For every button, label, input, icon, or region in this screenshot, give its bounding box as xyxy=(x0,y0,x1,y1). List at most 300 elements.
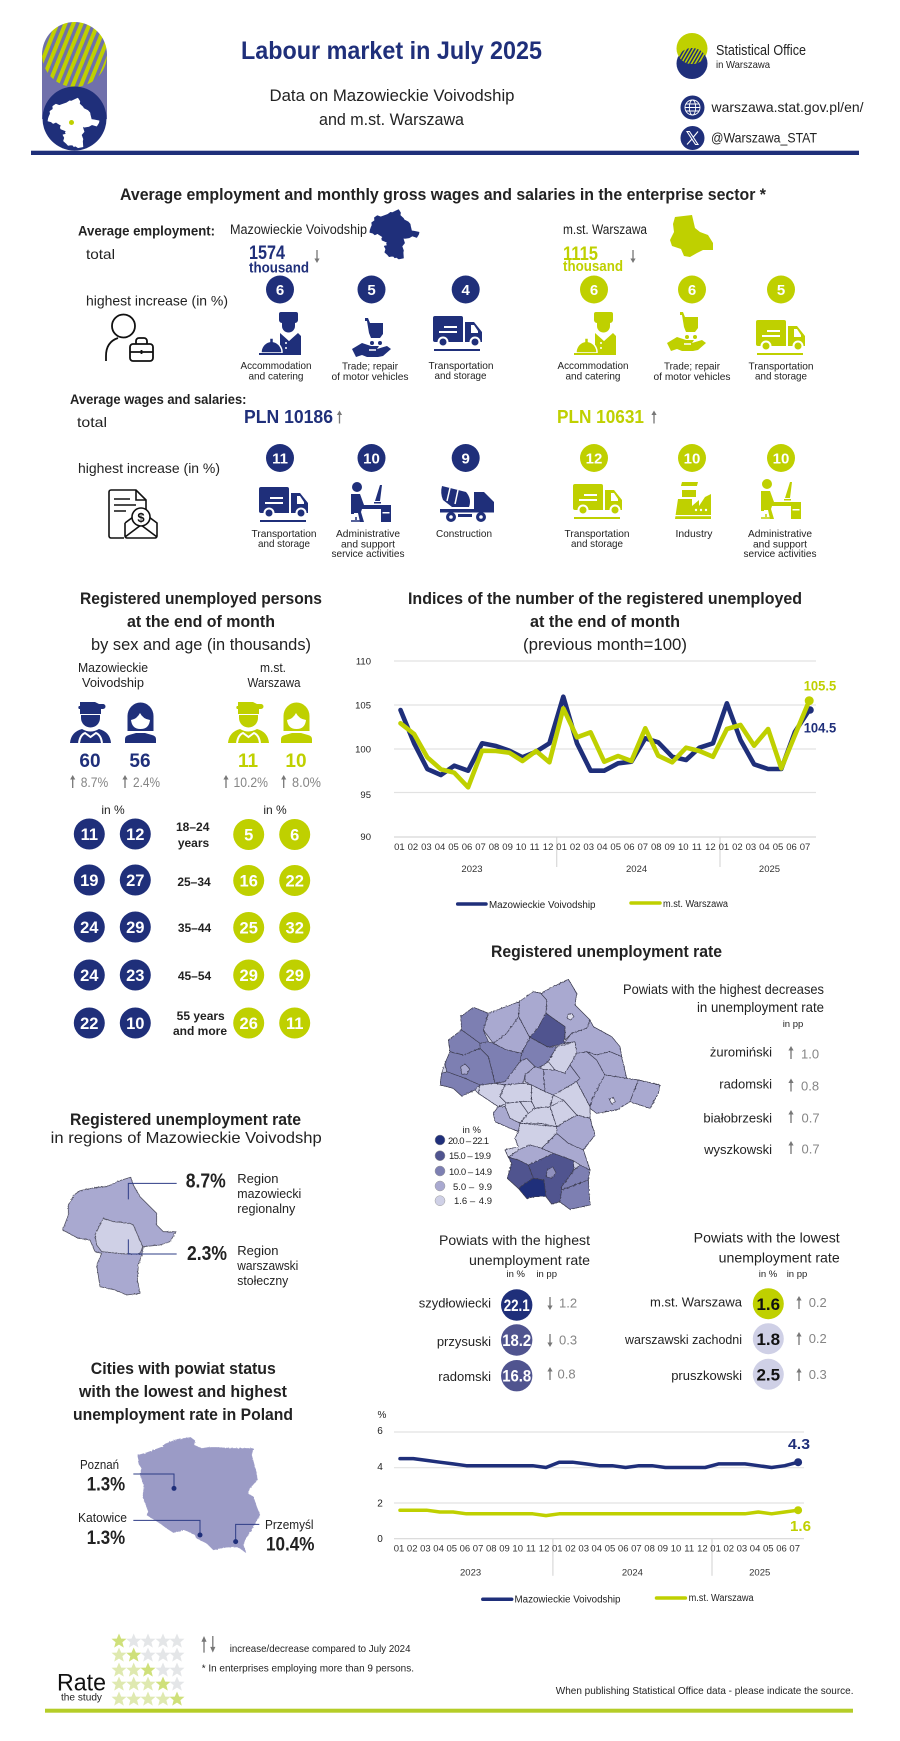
panel: highest unemployment rate: radomski xyxy=(438,1369,491,1384)
line chart: indices: 07 xyxy=(475,842,486,853)
year-on-year changes: 8.0% xyxy=(292,775,321,790)
employment sector labels: Transportation xyxy=(748,360,814,372)
panel: highest decreases: 0.7 xyxy=(802,1111,820,1126)
panel: highest unemployment rate: 22.1 xyxy=(504,1296,530,1315)
Mazowieckie wages: PLN 10186 xyxy=(244,407,333,427)
callouts: regional rates xyxy=(186,1171,301,1288)
employment increase badges: 6 xyxy=(590,282,598,299)
legend: m.st. Warszawa xyxy=(689,1593,754,1604)
logo: Statistical Office in Warszawa: Statistical Office xyxy=(716,43,806,59)
line chart: unemployment rate: 02 xyxy=(565,1544,576,1555)
wages increase badges: 12 xyxy=(586,450,602,468)
line chart: indices: 11 xyxy=(692,842,702,853)
age group badges: Warszawa xyxy=(233,819,310,1038)
map legend: 1.6 – xyxy=(454,1196,476,1207)
legend: m.st. Warszawa xyxy=(663,899,728,910)
line chart: indices: 95 xyxy=(360,790,371,801)
wage sector labels: and storage xyxy=(571,538,623,550)
age group badges: Warszawa: 16 xyxy=(240,872,258,890)
icon: payslip document and envelope xyxy=(109,490,157,538)
callouts: regional rates: 2.3% xyxy=(187,1243,227,1265)
heading: cities with powiat status xyxy=(73,1359,293,1424)
callouts: regional rates: stołeczny xyxy=(237,1273,289,1288)
age group badges: Mazowieckie: 27 xyxy=(126,872,144,890)
map legend: 9.9 xyxy=(479,1182,492,1193)
line chart: indices: 03 xyxy=(583,842,594,853)
arrows key xyxy=(201,1636,411,1655)
panel: unemployed by sex xyxy=(70,661,321,1038)
employment increase badges: 6 xyxy=(688,282,696,299)
year-on-year changes xyxy=(70,775,321,790)
age group badges: Warszawa: 32 xyxy=(286,920,304,938)
line chart: indices: 06 xyxy=(786,842,797,853)
arrows key: increase/decrease compared to July 2024 xyxy=(230,1643,411,1655)
series: Mazowieckie rate xyxy=(400,1458,802,1468)
map legend: 10.0 – 14.9 xyxy=(449,1167,492,1178)
line chart: indices: 2023 xyxy=(461,864,483,875)
panel: highest unemployment rate: in % xyxy=(506,1269,525,1280)
employment sector labels: and catering xyxy=(248,370,304,382)
line chart: unemployment rate: 08 xyxy=(486,1544,497,1555)
line chart: unemployment rate: 12 xyxy=(697,1544,708,1555)
line chart: indices: 07 xyxy=(638,842,648,853)
series: Warszawa rate xyxy=(400,1506,802,1516)
panel: highest decreases: 0.8 xyxy=(801,1079,819,1094)
panel: highest unemployment rate: 0.3 xyxy=(559,1333,577,1348)
line chart: unemployment rate: 03 xyxy=(737,1544,747,1555)
age group labels: 55 years xyxy=(177,1009,225,1023)
wage sector labels: and support xyxy=(753,538,807,550)
age group badges: Mazowieckie: 29 xyxy=(126,919,144,937)
line chart: indices: 04 xyxy=(597,842,607,853)
age group badges: Mazowieckie: 11 xyxy=(81,826,98,844)
line chart: unemployment rate: 10 xyxy=(671,1544,681,1555)
subtitle xyxy=(270,86,514,129)
line chart: unemployment rate: 4 xyxy=(377,1462,383,1473)
heading: registered unemployed persons: Registered unemployed persons xyxy=(80,589,322,608)
line chart: unemployment rate: 01 xyxy=(552,1544,563,1555)
wage sector labels: Administrative xyxy=(748,528,812,540)
wage sector labels: service activities xyxy=(744,548,816,560)
map legend xyxy=(435,1125,492,1207)
line chart: unemployment rate: 09 xyxy=(499,1544,510,1555)
callouts: regional rates: warszawski xyxy=(236,1258,298,1273)
line chart: indices: 05 xyxy=(448,842,459,853)
panel: lowest unemployment rate: 0.2 xyxy=(809,1331,827,1346)
line chart: unemployment rate: 11 xyxy=(526,1544,536,1555)
panel: unemployed by sex: Mazowieckie xyxy=(78,661,148,675)
panel: highest decreases xyxy=(623,981,824,1157)
heading: registered unemployed persons: by sex and age (in thousands) xyxy=(91,635,311,654)
line chart: indices: 05 xyxy=(773,842,783,853)
line chart: unemployment rate: 1.6 xyxy=(790,1518,811,1535)
line chart: indices: 100 xyxy=(355,744,371,756)
header graphic: capsule with map xyxy=(42,22,107,150)
line chart: indices: 03 xyxy=(421,842,432,853)
Warszawa total xyxy=(563,215,713,275)
wage sector labels: and storage xyxy=(258,538,310,550)
panel: highest unemployment rate: 1.2 xyxy=(559,1296,577,1311)
icons: employment sectors xyxy=(259,312,805,357)
panel: unemployed by sex: in % xyxy=(263,803,287,817)
line chart: indices: 12 xyxy=(543,842,553,853)
line chart: indices: 10 xyxy=(516,842,526,853)
line chart: indices: 06 xyxy=(462,842,472,853)
panel: highest unemployment rate: przysuski xyxy=(437,1334,491,1349)
line chart: unemployment rate: 07 xyxy=(473,1544,483,1555)
panel: lowest unemployment rate: 2.5 xyxy=(756,1366,780,1384)
line chart: unemployment rate: 11 xyxy=(684,1544,694,1555)
employment sector labels: and storage xyxy=(755,370,807,382)
callouts: regional rates: mazowiecki xyxy=(237,1186,301,1201)
line chart: indices: 105 xyxy=(355,700,371,712)
wage sector labels: Transportation xyxy=(252,528,317,540)
legend xyxy=(458,899,728,911)
legend: Mazowieckie Voivodship xyxy=(514,1595,621,1606)
employment increase badges: 5 xyxy=(367,282,376,299)
line chart: indices: 09 xyxy=(502,842,513,853)
employment increase badges xyxy=(266,276,795,304)
panel: lowest unemployment rate: Powiats with the lowest xyxy=(694,1230,840,1246)
line chart: unemployment rate: 0 xyxy=(377,1534,383,1545)
wages increase badges: 10 xyxy=(684,450,700,468)
line chart: unemployment rate: 02 xyxy=(724,1544,734,1555)
age group badges: Warszawa: 22 xyxy=(286,872,304,890)
employment sector labels: Transportation xyxy=(428,360,494,372)
age group badges: Warszawa: 6 xyxy=(290,826,299,844)
line chart: indices: 01 xyxy=(394,842,405,853)
logo: Statistical Office in Warszawa xyxy=(676,33,806,79)
line chart: unemployment rate: 04 xyxy=(433,1544,444,1555)
map legend: in % xyxy=(462,1125,481,1136)
wage sector labels: Administrative xyxy=(336,528,400,540)
callouts: regional rates: regionalny xyxy=(237,1201,296,1216)
panel: lowest unemployment rate: 0.2 xyxy=(809,1295,827,1310)
line chart: unemployment rate: 6 xyxy=(377,1426,383,1437)
heading: indices xyxy=(408,589,802,654)
wages increase badges: 10 xyxy=(773,450,789,468)
age group labels: years xyxy=(178,836,210,850)
line chart: indices: 90 xyxy=(360,832,371,843)
Warszawa total: m.st. Warszawa xyxy=(563,222,647,237)
employment sector labels: Accommodation xyxy=(558,360,629,372)
heading: rate in regions: in regions of Mazowieckie Voivodshp xyxy=(51,1130,322,1147)
panel: average employment: total xyxy=(86,246,115,262)
year-on-year changes: 2.4% xyxy=(133,775,160,790)
totals by sex: 10 xyxy=(285,751,307,772)
panel: highest decreases: 0.7 xyxy=(802,1142,820,1157)
wage sector labels: Construction xyxy=(436,528,492,540)
line chart: unemployment rate: 06 xyxy=(460,1544,470,1555)
rate the study: star ratings: Rate xyxy=(57,1670,106,1697)
website link: warszawa.stat.gov.pl/en/ xyxy=(711,99,864,115)
city labels: Poznań xyxy=(80,1457,119,1472)
panel: highest decreases: radomski xyxy=(719,1077,772,1092)
line chart: indices: 06 xyxy=(624,842,634,853)
line chart: unemployment rate: 06 xyxy=(776,1544,787,1555)
line chart: indices: 03 xyxy=(746,842,756,853)
age group badges: Warszawa: 29 xyxy=(286,967,304,985)
X account xyxy=(680,126,817,150)
totals by sex xyxy=(79,751,307,772)
totals by sex: 60 xyxy=(79,751,101,772)
line chart: indices: 04 xyxy=(759,842,770,853)
map: powiats of Mazowieckie xyxy=(440,979,660,1209)
Warszawa wages: PLN 10631 xyxy=(557,407,644,427)
employment sector labels: Trade; repair xyxy=(342,360,398,372)
age group labels: and more xyxy=(173,1024,227,1038)
line chart: unemployment rate: 10 xyxy=(512,1544,523,1555)
panel: lowest unemployment rate: 0.3 xyxy=(809,1367,827,1382)
totals by sex: 56 xyxy=(129,751,151,772)
panel: highest decreases: wyszkowski xyxy=(703,1142,772,1157)
Mazowieckie total: thousand xyxy=(249,260,309,277)
panel: average employment: highest increase (in %) xyxy=(86,293,228,309)
map: regions of Mazowieckie xyxy=(63,1177,177,1295)
line chart: indices: 12 xyxy=(705,842,716,853)
panel: unemployed by sex: in % xyxy=(101,803,125,817)
panel: average wages xyxy=(70,391,816,560)
panel: highest decreases: żuromiński xyxy=(710,1045,772,1060)
panel: lowest unemployment rate: warszawski zachodni xyxy=(624,1332,742,1347)
line chart: unemployment rate: 2025 xyxy=(749,1568,770,1579)
website link xyxy=(680,96,864,120)
line chart: unemployment rate: 2024 xyxy=(622,1568,643,1579)
line chart: indices: 02 xyxy=(408,842,418,853)
age group badges: Warszawa: 25 xyxy=(240,920,258,938)
panel: highest unemployment rate: 16.8 xyxy=(502,1367,531,1386)
panel: highest unemployment rate: szydłowiecki xyxy=(419,1296,491,1311)
Mazowieckie total: 1574 xyxy=(249,243,285,264)
line chart: unemployment rate: 05 xyxy=(447,1544,457,1555)
panel: highest decreases: in pp xyxy=(783,1019,803,1030)
line chart: unemployment rate: 03 xyxy=(420,1544,431,1555)
panel: lowest unemployment rate xyxy=(624,1230,840,1390)
age group labels: 18–24 xyxy=(176,820,210,834)
employment sector labels: and storage xyxy=(434,370,487,382)
line chart: unemployment rate: 12 xyxy=(539,1544,549,1555)
Mazowieckie total: Mazowieckie Voivodship xyxy=(230,222,367,237)
map legend: 4.9 xyxy=(479,1196,492,1207)
city labels: 1.3% xyxy=(87,1528,125,1549)
panel: average employment: Average employment: xyxy=(78,222,215,238)
panel: highest unemployment rate: 18.2 xyxy=(502,1331,531,1350)
line chart: indices: 10 xyxy=(678,842,689,853)
city labels xyxy=(78,1457,315,1556)
panel: highest decreases: 1.0 xyxy=(801,1047,819,1062)
heading: indices: (previous month=100) xyxy=(523,635,687,654)
panel: average wages: Average wages and salaries: xyxy=(70,391,246,407)
age group labels: 45–54 xyxy=(178,969,212,983)
map legend: 20.0 – 22.1 xyxy=(448,1136,489,1147)
line chart: unemployment rate: 01 xyxy=(710,1544,721,1555)
wage sector labels: Transportation xyxy=(564,528,630,540)
panel: lowest unemployment rate: 1.6 xyxy=(756,1295,780,1314)
line chart: indices: 07 xyxy=(800,842,810,853)
line chart: unemployment rate: 04 xyxy=(750,1544,760,1555)
age group labels xyxy=(173,820,227,1038)
wages increase badges: 10 xyxy=(363,450,380,468)
wage sector labels: and support xyxy=(341,538,395,550)
line chart: indices: 105.5 xyxy=(804,678,836,694)
line chart: indices: 02 xyxy=(570,842,580,853)
line chart: indices: 05 xyxy=(610,842,621,853)
line chart: indices: 08 xyxy=(489,842,499,853)
age group badges: Warszawa: 5 xyxy=(244,826,253,844)
heading: cities with powiat status: with the lowest and highest xyxy=(78,1382,287,1401)
line chart: indices xyxy=(355,656,836,911)
heading: registered unemployed persons: at the end of month xyxy=(127,612,275,631)
panel: lowest unemployment rate: in % xyxy=(759,1269,778,1280)
line chart: indices: 01 xyxy=(556,842,567,853)
line chart: indices: 01 xyxy=(719,842,729,853)
age group badges: Mazowieckie: 10 xyxy=(126,1015,144,1033)
heading: enterprise sector: Average employment and monthly gross wages and salaries in the enterprise sector * xyxy=(120,185,766,204)
line chart: indices: 104.5 xyxy=(804,720,836,736)
line chart: unemployment rate xyxy=(377,1410,811,1606)
city labels: Katowice xyxy=(78,1510,127,1525)
heading: cities with powiat status: unemployment rate in Poland xyxy=(73,1405,293,1424)
panel: highest decreases: białobrzeski xyxy=(703,1111,772,1126)
age group badges: Mazowieckie: 19 xyxy=(80,872,98,890)
legend: Mazowieckie Voivodship xyxy=(489,900,596,911)
panel: highest unemployment rate: in pp xyxy=(536,1269,557,1280)
callouts: regional rates: Region xyxy=(237,1243,279,1258)
line chart: indices: 2025 xyxy=(759,864,780,875)
callouts: regional rates: 8.7% xyxy=(186,1171,226,1193)
line chart: unemployment rate: 05 xyxy=(605,1544,615,1555)
map legend: 15.0 – 19.9 xyxy=(449,1151,491,1162)
employment sector labels: and catering xyxy=(566,370,621,382)
rate the study: star ratings: the study xyxy=(61,1692,103,1704)
city labels: Przemyśl xyxy=(265,1517,314,1532)
panel: average employment xyxy=(78,210,814,383)
line chart: indices: 02 xyxy=(732,842,743,853)
map legend: 5.0 – xyxy=(453,1182,475,1193)
wage sector labels: service activities xyxy=(332,548,404,560)
age group badges: Warszawa: 11 xyxy=(286,1015,303,1033)
Warszawa total: 1115 xyxy=(563,244,598,265)
Warszawa total: thousand xyxy=(563,258,623,275)
year-on-year changes: 8.7% xyxy=(81,775,108,790)
heading: cities with powiat status: Cities with powiat status xyxy=(91,1359,276,1378)
panel: highest unemployment rate: unemployment rate xyxy=(469,1252,590,1268)
age group badges: Mazowieckie: 23 xyxy=(126,967,144,985)
X account: @Warszawa_STAT xyxy=(711,130,817,146)
icon: payslip document and envelope: $ xyxy=(137,510,145,525)
heading: indices: at the end of month xyxy=(530,612,680,631)
Mazowieckie total xyxy=(230,210,419,277)
age group badges: Warszawa: 26 xyxy=(240,1015,258,1033)
heading: registered unemployment rate: Registered unemployment rate xyxy=(491,942,722,961)
wages increase badges xyxy=(266,444,795,472)
panel: lowest unemployment rate: unemployment rate xyxy=(719,1250,840,1266)
employment increase badges: 5 xyxy=(777,282,785,299)
panel: unemployed by sex: Warszawa xyxy=(248,676,301,690)
panel: highest unemployment rate: Powiats with the highest xyxy=(439,1232,590,1248)
city labels: 1.3% xyxy=(87,1475,125,1496)
line chart: unemployment rate: % xyxy=(378,1410,387,1421)
heading: rate in regions xyxy=(51,1110,322,1147)
city labels: 10.4% xyxy=(266,1535,315,1556)
wages increase badges: 11 xyxy=(272,450,288,468)
employment sector labels: Accommodation xyxy=(240,360,312,372)
line chart: unemployment rate: 09 xyxy=(658,1544,668,1555)
line chart: unemployment rate: 07 xyxy=(789,1544,800,1555)
line chart: indices: 08 xyxy=(651,842,662,853)
line chart: unemployment rate: 03 xyxy=(578,1544,589,1555)
panel: highest decreases: Powiats with the highest decreases xyxy=(623,981,824,997)
line chart: unemployment rate: 2023 xyxy=(460,1568,481,1579)
subtitle: Data on Mazowieckie Voivodship xyxy=(270,86,514,105)
age group badges: Mazowieckie: 24 xyxy=(80,967,99,985)
heading: rate in regions: Registered unemployment rate xyxy=(70,1110,301,1129)
age group badges: Mazowieckie: 12 xyxy=(126,826,144,844)
icons: man and woman xyxy=(70,702,312,743)
employment sector labels: Trade; repair xyxy=(664,360,720,372)
wage sector labels: Industry xyxy=(676,528,713,540)
age group labels: 35–44 xyxy=(178,921,212,935)
line chart: unemployment rate: 07 xyxy=(631,1544,642,1555)
age group badges: Mazowieckie xyxy=(74,818,151,1038)
employment increase badges: 6 xyxy=(276,282,284,299)
line chart: unemployment rate: 08 xyxy=(644,1544,655,1555)
totals by sex: 11 xyxy=(238,751,258,772)
age group labels: 25–34 xyxy=(177,875,211,889)
panel: lowest unemployment rate: in pp xyxy=(787,1269,807,1280)
panel: lowest unemployment rate: m.st. Warszawa xyxy=(650,1295,743,1310)
heading: registered unemployed persons xyxy=(80,589,322,654)
employment sector labels xyxy=(240,360,814,383)
employment increase badges: 4 xyxy=(462,282,471,299)
panel: unemployed by sex: Voivodship xyxy=(82,676,144,690)
panel: lowest unemployment rate: 1.8 xyxy=(756,1330,780,1349)
line chart: unemployment rate: 2 xyxy=(377,1499,383,1510)
panel: average wages: highest increase (in %) xyxy=(78,460,220,476)
employment sector labels: of motor vehicles xyxy=(654,371,730,383)
line chart: indices: 09 xyxy=(665,842,675,853)
icons: wage sectors xyxy=(259,479,801,522)
panel: highest decreases: in unemployment rate xyxy=(697,999,824,1015)
age group badges: Mazowieckie: 22 xyxy=(80,1015,98,1033)
wages increase badges: 9 xyxy=(462,450,470,468)
line chart: indices: 110 xyxy=(356,656,371,668)
panel: lowest unemployment rate: pruszkowski xyxy=(671,1368,742,1383)
line chart: unemployment rate: 04 xyxy=(592,1544,602,1555)
year-on-year changes: 10.2% xyxy=(234,775,268,790)
line chart: indices: 11 xyxy=(530,842,540,853)
icon: person with briefcase xyxy=(106,314,153,361)
rate the study: star ratings xyxy=(57,1634,184,1706)
footnote: * In enterprises employing more than 9 persons. xyxy=(202,1663,414,1675)
panel: unemployed by sex: m.st. xyxy=(260,661,286,675)
series: Mazowieckie Voivodship xyxy=(400,697,814,775)
line chart: unemployment rate: 01 xyxy=(394,1544,404,1555)
callouts: regional rates: Region xyxy=(237,1171,279,1186)
age group badges: Mazowieckie: 24 xyxy=(80,919,99,937)
line chart: unemployment rate: 05 xyxy=(763,1544,774,1555)
logo: Statistical Office in Warszawa: in Warszawa xyxy=(716,59,770,71)
line chart: indices: 04 xyxy=(435,842,445,853)
panel: average wages: total xyxy=(77,414,107,430)
heading: indices: Indices of the number of the registered unemployed xyxy=(408,589,802,608)
line chart: unemployment rate: 06 xyxy=(618,1544,628,1555)
wage sector labels xyxy=(252,528,816,560)
line chart: unemployment rate: 02 xyxy=(407,1544,417,1555)
series: m.st. Warszawa xyxy=(400,696,814,787)
panel: highest unemployment rate: 0.8 xyxy=(558,1367,576,1382)
title: Labour market in July 2025 xyxy=(241,37,542,65)
